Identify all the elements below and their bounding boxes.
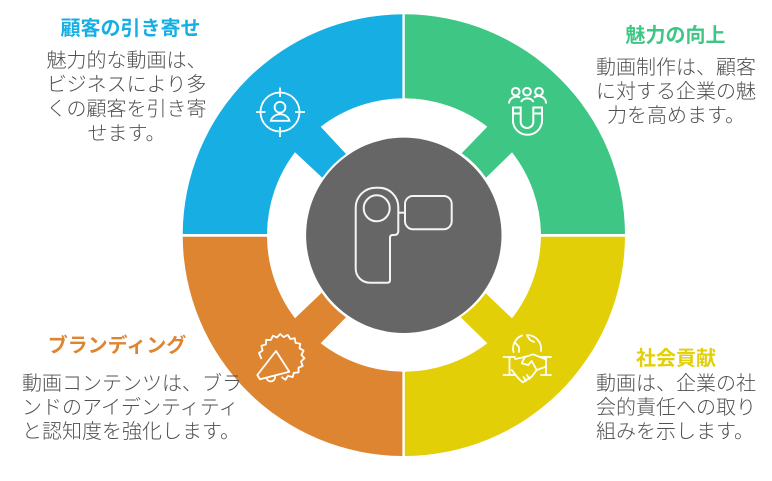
icon: target with person [256, 88, 305, 137]
body text: social contribution: 動画は、企業の社 [596, 372, 756, 395]
body text: branding: 動画コンテンツは、ブラ [22, 372, 242, 395]
text block: customer attraction [46, 17, 206, 145]
icon: magnet attracting people [509, 88, 546, 135]
text block: social contribution [596, 347, 756, 443]
body text: branding: と認知度を強化します。 [22, 420, 240, 443]
center circle [306, 138, 501, 333]
heading: charm improvement: 魅力の向上 [626, 23, 726, 47]
body text: customer attraction: 魅力的な動画は、 [46, 49, 206, 72]
icon: handshake and globe [504, 335, 551, 382]
text block: branding [22, 333, 242, 443]
body text: social contribution: 会的責任への取り [596, 396, 756, 419]
icon: megaphone with burst [257, 334, 304, 381]
icon: video camera [356, 188, 452, 283]
body text: charm improvement: に対する企業の魅 [596, 80, 756, 103]
segment: customer attraction (blue) [183, 14, 402, 234]
segment: social contribution (yellow) [405, 237, 625, 456]
heading: social contribution: 社会貢献 [636, 347, 716, 370]
heading: customer attraction: 顧客の引き寄せ [60, 17, 200, 40]
text block: charm improvement [596, 23, 756, 127]
body text: customer attraction: せます。 [88, 123, 166, 145]
body text: charm improvement: 力を高めます。 [607, 104, 745, 127]
body text: charm improvement: 動画制作は、顧客 [596, 56, 756, 79]
heading: branding: ブランディング [48, 333, 186, 357]
body text: customer attraction: くの顧客を引き寄 [46, 98, 206, 120]
body text: branding [22, 372, 242, 443]
segment: branding (orange) [183, 237, 402, 456]
body text: customer attraction [46, 49, 206, 145]
body text: social contribution: 組みを示します。 [596, 420, 754, 443]
body text: branding: ンドのアイデンティティ [22, 396, 239, 419]
body text: customer attraction: ビジネスにより多 [47, 73, 206, 96]
body text: charm improvement [596, 56, 756, 127]
body text: social contribution [596, 372, 756, 443]
segment: charm improvement (green) [405, 14, 625, 234]
